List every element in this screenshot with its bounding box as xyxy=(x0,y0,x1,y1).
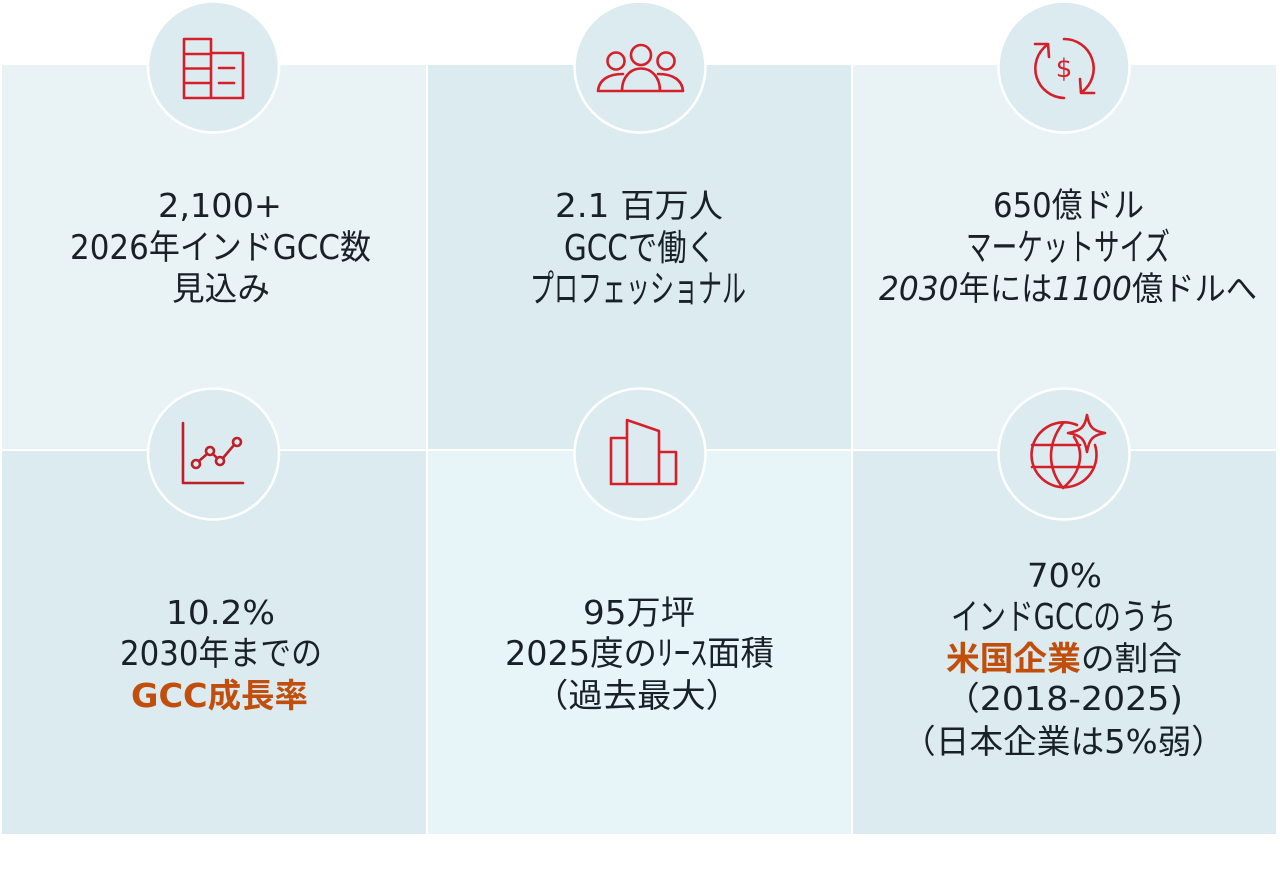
text: growth rate: GCC成長率 xyxy=(131,676,308,715)
text: lease area: 2025度のﾘｰｽ面積 xyxy=(505,634,774,674)
icon: dollar cycle xyxy=(998,2,1130,132)
icon: dollar cycle: $ xyxy=(1056,54,1072,84)
text: US share: 米国企業の割合 xyxy=(946,639,1182,678)
text: professionals: 2.1 百万人 xyxy=(555,186,723,225)
text: US share: 70% xyxy=(1027,556,1102,595)
panel: US share xyxy=(853,451,1276,834)
text: GCC count: 2026年インドGCC数 xyxy=(70,228,371,268)
text: market size: 2030年には1100億ドルへ xyxy=(879,269,1257,308)
text: lease area: 95万坪 xyxy=(583,593,695,632)
text: market size xyxy=(879,186,1257,308)
text: professionals: GCCで働く xyxy=(564,228,716,269)
text: growth rate xyxy=(120,593,322,715)
icon: globe with sparkle xyxy=(998,388,1130,520)
text: US share: インドGCCのうち xyxy=(951,597,1176,638)
text: lease area xyxy=(505,593,774,715)
icon: city buildings xyxy=(574,388,706,520)
icon: people group xyxy=(574,2,706,132)
text: market size: 650億ドル xyxy=(993,186,1144,226)
icon: office buildings xyxy=(148,2,279,132)
text: GCC count: 2,100+ xyxy=(158,186,282,225)
text: market size: マーケットサイズ xyxy=(966,226,1170,269)
panel: growth rate xyxy=(2,451,426,834)
panel: GCC count xyxy=(2,65,426,449)
text: growth rate: 2030年までの xyxy=(120,634,322,674)
panel: lease area xyxy=(428,451,851,834)
text: US share xyxy=(902,556,1225,761)
text: GCC count: 見込み xyxy=(172,269,270,308)
text: GCC count xyxy=(70,186,371,308)
panel: professionals xyxy=(428,65,851,449)
panel: market size xyxy=(853,65,1276,449)
text: lease area: （過去最大） xyxy=(534,676,740,715)
text: US share: （日本企業は5%弱） xyxy=(902,722,1225,761)
text: professionals: プロフェッショナル xyxy=(530,267,746,311)
icon: line chart xyxy=(148,388,279,520)
text: US share: （2018-2025) xyxy=(945,679,1183,718)
text: professionals xyxy=(530,186,746,311)
text: growth rate: 10.2% xyxy=(166,593,275,632)
